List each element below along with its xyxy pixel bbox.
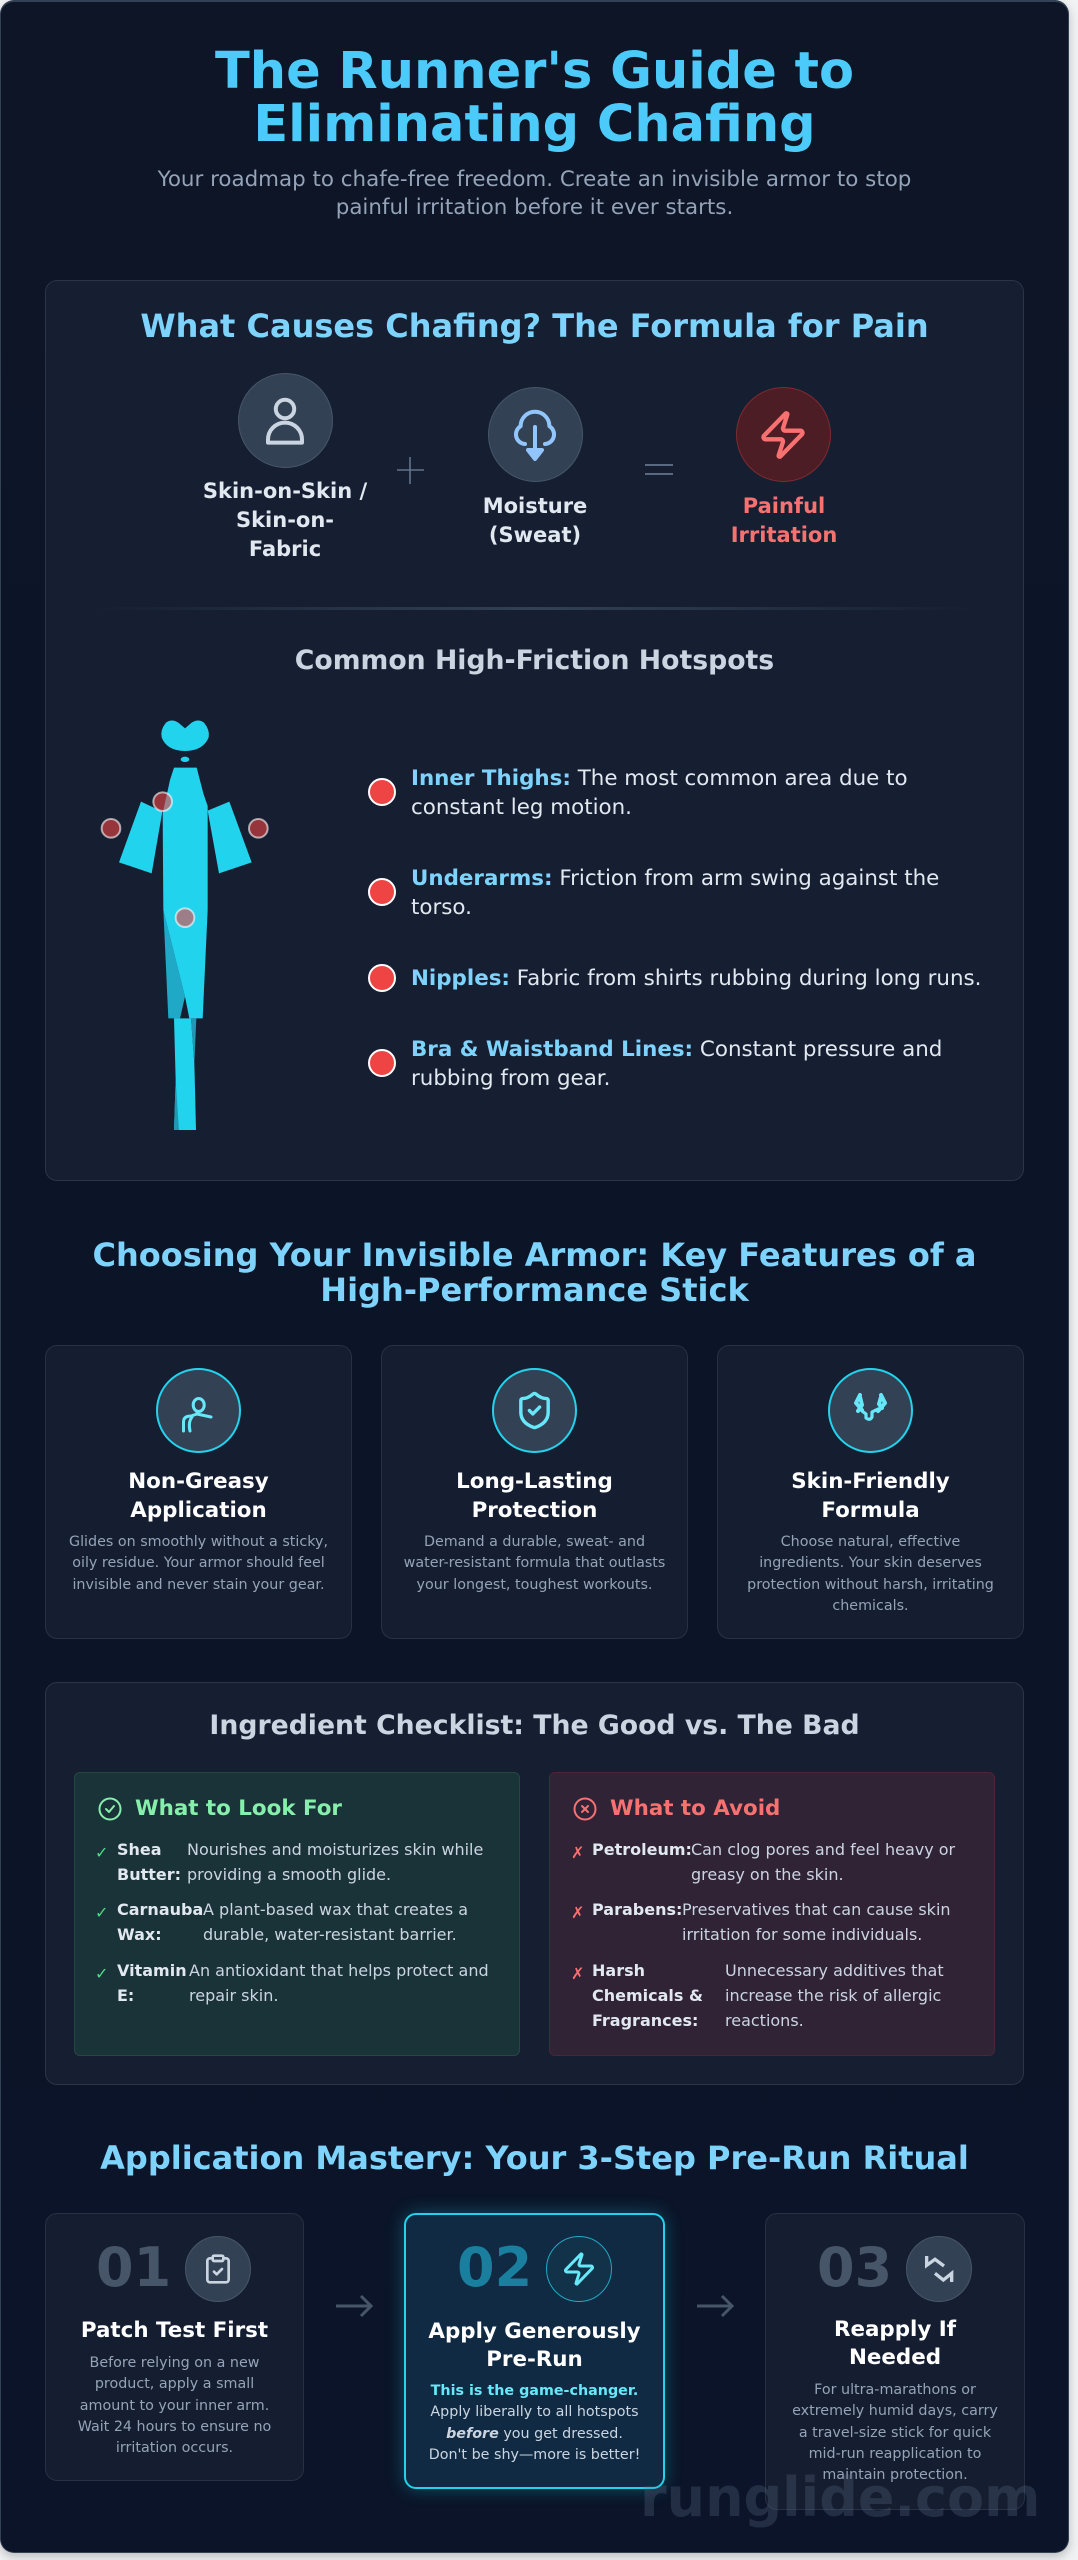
good item: shea butter: Butter: [117, 1865, 181, 1884]
feature description: chemicals. [832, 1598, 909, 1614]
feature description: protection without harsh, irritating [747, 1577, 994, 1593]
hotspot text: bra and waistband: Bra & Waistband Lines: Constant pressure and [411, 1037, 942, 1062]
feature title: Application [130, 1498, 267, 1522]
icon: clipboard check [185, 2236, 251, 2302]
step title: Pre-Run [486, 2347, 583, 2372]
icon: painful irritation bolt [736, 387, 831, 482]
feature description: water-resistant formula that outlasts [404, 1555, 665, 1571]
label: skin on skin: Fabric [249, 537, 321, 561]
bad item: harsh chemicals: Unnecessary additives that [725, 1961, 944, 1980]
hotspot text: inner thighs: Inner Thighs: The most common area due to [411, 766, 908, 791]
label: skin on skin: Skin-on-Skin / [203, 479, 367, 503]
step description [429, 2383, 640, 2463]
hotspot text: underarms: Underarms: Friction from arm swing against the [411, 866, 939, 891]
feature title: Skin-Friendly [791, 1469, 950, 1494]
heading: choosing your armor: Choosing Your Invisible Armor: Key Features of a [92, 1236, 977, 1274]
body diagram with hotspots [100, 720, 269, 1130]
heading: application mastery: Application Mastery: Your 3-Step Pre-Run Ritual [100, 2139, 969, 2177]
step description: maintain protection. [822, 2467, 968, 2483]
panel: step 2 highlighted [404, 2213, 665, 2489]
label: moisture: Moisture [483, 494, 587, 518]
hotspot text: nipples: Nipples: Fabric from shirts rubbing during long runs. [411, 966, 981, 991]
heading: choosing your armor [92, 1236, 977, 1309]
heading: ingredient checklist: Ingredient Checklist: The Good vs. The Bad [209, 1710, 860, 1741]
label: moisture: (Sweat) [489, 523, 581, 547]
title: Eliminating Chafing [253, 95, 816, 154]
label: skin on skin: Skin-on- [236, 508, 334, 532]
panel: what to avoid [549, 1772, 995, 2056]
bad item: harsh chemicals [571, 1961, 944, 2030]
step title [428, 2319, 641, 2372]
hotspot marker: inner thighs [368, 778, 396, 806]
label: painful irritation: Painful [743, 494, 825, 518]
panel: feature long-lasting [381, 1345, 688, 1639]
step number 03: 03 [817, 2236, 892, 2299]
feature title [128, 1469, 269, 1522]
feature description: Glides on smoothly without a sticky, [69, 1534, 328, 1550]
step description [792, 2382, 998, 2483]
arrow: step 2 to 3 [697, 2295, 734, 2317]
bad item: harsh chemicals: reactions. [725, 2011, 804, 2030]
hotspot text: bra and waistband [411, 1037, 942, 1091]
icon: shield check [492, 1368, 577, 1453]
label: painful irritation: Irritation [731, 523, 837, 547]
icon: runner [156, 1368, 241, 1453]
icon: skin on skin person [238, 373, 333, 468]
bad item: parabens [571, 1900, 951, 1944]
plus sign [397, 457, 424, 484]
equals sign [645, 464, 673, 475]
icon: skin-friendly dumbbell [828, 1368, 913, 1453]
bad item: petroleum: Petroleum: [592, 1840, 692, 1859]
hotspot text: underarms: torso. [411, 895, 472, 920]
subtitle: Your roadmap to chafe-free freedom. Create an invisible armor to stop [158, 167, 911, 192]
panel: feature skin-friendly [717, 1345, 1024, 1639]
step description: before you get dressed. [446, 2426, 623, 2442]
step number 01: 01 [96, 2236, 171, 2299]
good item: carnauba wax: Wax: [117, 1925, 162, 1944]
panel: what to look for [74, 1772, 520, 2056]
bad item: harsh chemicals: Fragrances: [592, 2011, 698, 2030]
title [215, 42, 854, 154]
feature description: Choose natural, effective [781, 1534, 960, 1550]
bad item: petroleum: ✗ [571, 1843, 584, 1862]
bad item: harsh chemicals: Chemicals & [592, 1986, 703, 2005]
good item: carnauba wax: Carnauba [117, 1900, 203, 1919]
feature title: Long-Lasting [456, 1469, 613, 1494]
step title [834, 2317, 956, 2370]
step description: irritation occurs. [116, 2440, 233, 2456]
label: skin on skin [203, 479, 368, 561]
feature description: oily residue. Your armor should feel [72, 1555, 325, 1571]
bad item: harsh chemicals: increase the risk of allergic [725, 1986, 941, 2005]
icon: zap [546, 2236, 612, 2302]
feature title: Non-Greasy [128, 1469, 269, 1494]
hotspot text: underarms [411, 866, 939, 920]
hotspot text: inner thighs [411, 766, 908, 820]
step description: Don't be shy—more is better! [429, 2447, 640, 2463]
step description: Wait 24 hours to ensure no [78, 2419, 271, 2435]
subtitle: painful irritation before it ever starts. [336, 195, 733, 220]
panel: step 3 [765, 2213, 1025, 2510]
step description: product, apply a small [95, 2376, 254, 2392]
good item: vitamin e [95, 1961, 489, 2005]
good item: shea butter: Nourishes and moisturizes skin while [187, 1840, 483, 1859]
panel: feature non-greasy [45, 1345, 352, 1639]
bad item: harsh chemicals: Harsh [592, 1961, 645, 1980]
step number 02: 02 [457, 2236, 532, 2299]
subtitle [158, 167, 911, 220]
panel: causes and hotspots [45, 280, 1024, 1181]
bad item: petroleum: greasy on the skin. [691, 1865, 844, 1884]
feature title: Protection [472, 1498, 597, 1522]
good item: vitamin e: ✓ [95, 1964, 108, 1983]
bad item: parabens: Preservatives that can cause skin [682, 1900, 951, 1919]
heading: what to avoid: What to Avoid [610, 1796, 780, 1821]
panel: step 1 [45, 2213, 304, 2481]
heading: what to look for: What to Look For [135, 1796, 342, 1821]
step title: Apply Generously [428, 2319, 641, 2344]
bad item: parabens: irritation for some individuals. [682, 1925, 922, 1944]
step description: This is the game-changer. [431, 2383, 638, 2399]
label: painful irritation [731, 494, 837, 547]
step description: amount to your inner arm. [80, 2398, 269, 2414]
good item: shea butter [95, 1840, 483, 1884]
feature description: Demand a durable, sweat- and [424, 1534, 645, 1550]
step description: a travel-size stick for quick [799, 2425, 991, 2441]
feature description [747, 1534, 994, 1614]
hotspot marker: nipples [368, 964, 396, 992]
step description: Before relying on a new [90, 2355, 259, 2371]
step description: For ultra-marathons or [814, 2382, 976, 2398]
hotspot text: bra and waistband: rubbing from gear. [411, 1066, 610, 1091]
heading: choosing your armor: High-Performance Stick [320, 1271, 749, 1309]
bad item: parabens: ✗ [571, 1903, 584, 1922]
good item: vitamin e: Vitamin [117, 1961, 187, 1980]
heading: hotspots: Common High-Friction Hotspots [295, 645, 774, 676]
hotspot marker: underarms [368, 878, 396, 906]
good item: carnauba wax: A plant-based wax that creates a [203, 1900, 468, 1919]
bad item: petroleum [571, 1840, 956, 1884]
feature description: your longest, toughest workouts. [417, 1577, 652, 1593]
good item: vitamin e: An antioxidant that helps protect and [189, 1961, 489, 1980]
panel: ingredient checklist [45, 1682, 1024, 2085]
arrow: step 1 to 2 [336, 2295, 373, 2317]
step description [78, 2355, 271, 2456]
feature description: ingredients. Your skin deserves [759, 1555, 982, 1571]
step title: Patch Test First [81, 2318, 268, 2343]
step description: mid-run reapplication to [809, 2446, 981, 2462]
feature title [456, 1469, 613, 1522]
bad item: harsh chemicals: ✗ [571, 1964, 584, 1983]
bad item: parabens: Parabens: [592, 1900, 682, 1919]
step description: extremely humid days, carry [792, 2403, 998, 2419]
label: moisture [483, 494, 587, 547]
icon: circle check [98, 1798, 122, 1820]
watermark: runglide.com [640, 2466, 1040, 2529]
good item: carnauba wax: ✓ [95, 1903, 108, 1922]
feature title: Formula [821, 1498, 920, 1522]
title: The Runner's Guide to [215, 42, 854, 101]
good item: vitamin e: repair skin. [189, 1986, 278, 2005]
bad item: petroleum: Can clog pores and feel heavy or [691, 1840, 955, 1859]
heading: what causes chafing: What Causes Chafing? The Formula for Pain [140, 307, 929, 345]
hotspot marker: bra and waistband [368, 1049, 396, 1077]
good item: shea butter: Shea [117, 1840, 162, 1859]
step title: Needed [849, 2345, 941, 2370]
feature description: invisible and never stain your gear. [72, 1577, 325, 1593]
good item: shea butter: ✓ [95, 1843, 108, 1862]
step title: Reapply If [834, 2317, 956, 2342]
icon: moisture cloud [488, 387, 583, 482]
feature title [791, 1469, 950, 1522]
icon: circle x [574, 1798, 596, 1820]
feature description [404, 1534, 665, 1593]
good item: shea butter: providing a smooth glide. [187, 1865, 391, 1884]
good item: carnauba wax [95, 1900, 468, 1944]
good item: carnauba wax: durable, water-resistant barrier. [203, 1925, 457, 1944]
hotspot text: inner thighs: constant leg motion. [411, 795, 632, 820]
step description: Apply liberally to all hotspots [430, 2404, 639, 2420]
feature description [69, 1534, 328, 1593]
good item: vitamin e: E: [117, 1986, 134, 2005]
icon: repeat arrows [906, 2236, 972, 2302]
